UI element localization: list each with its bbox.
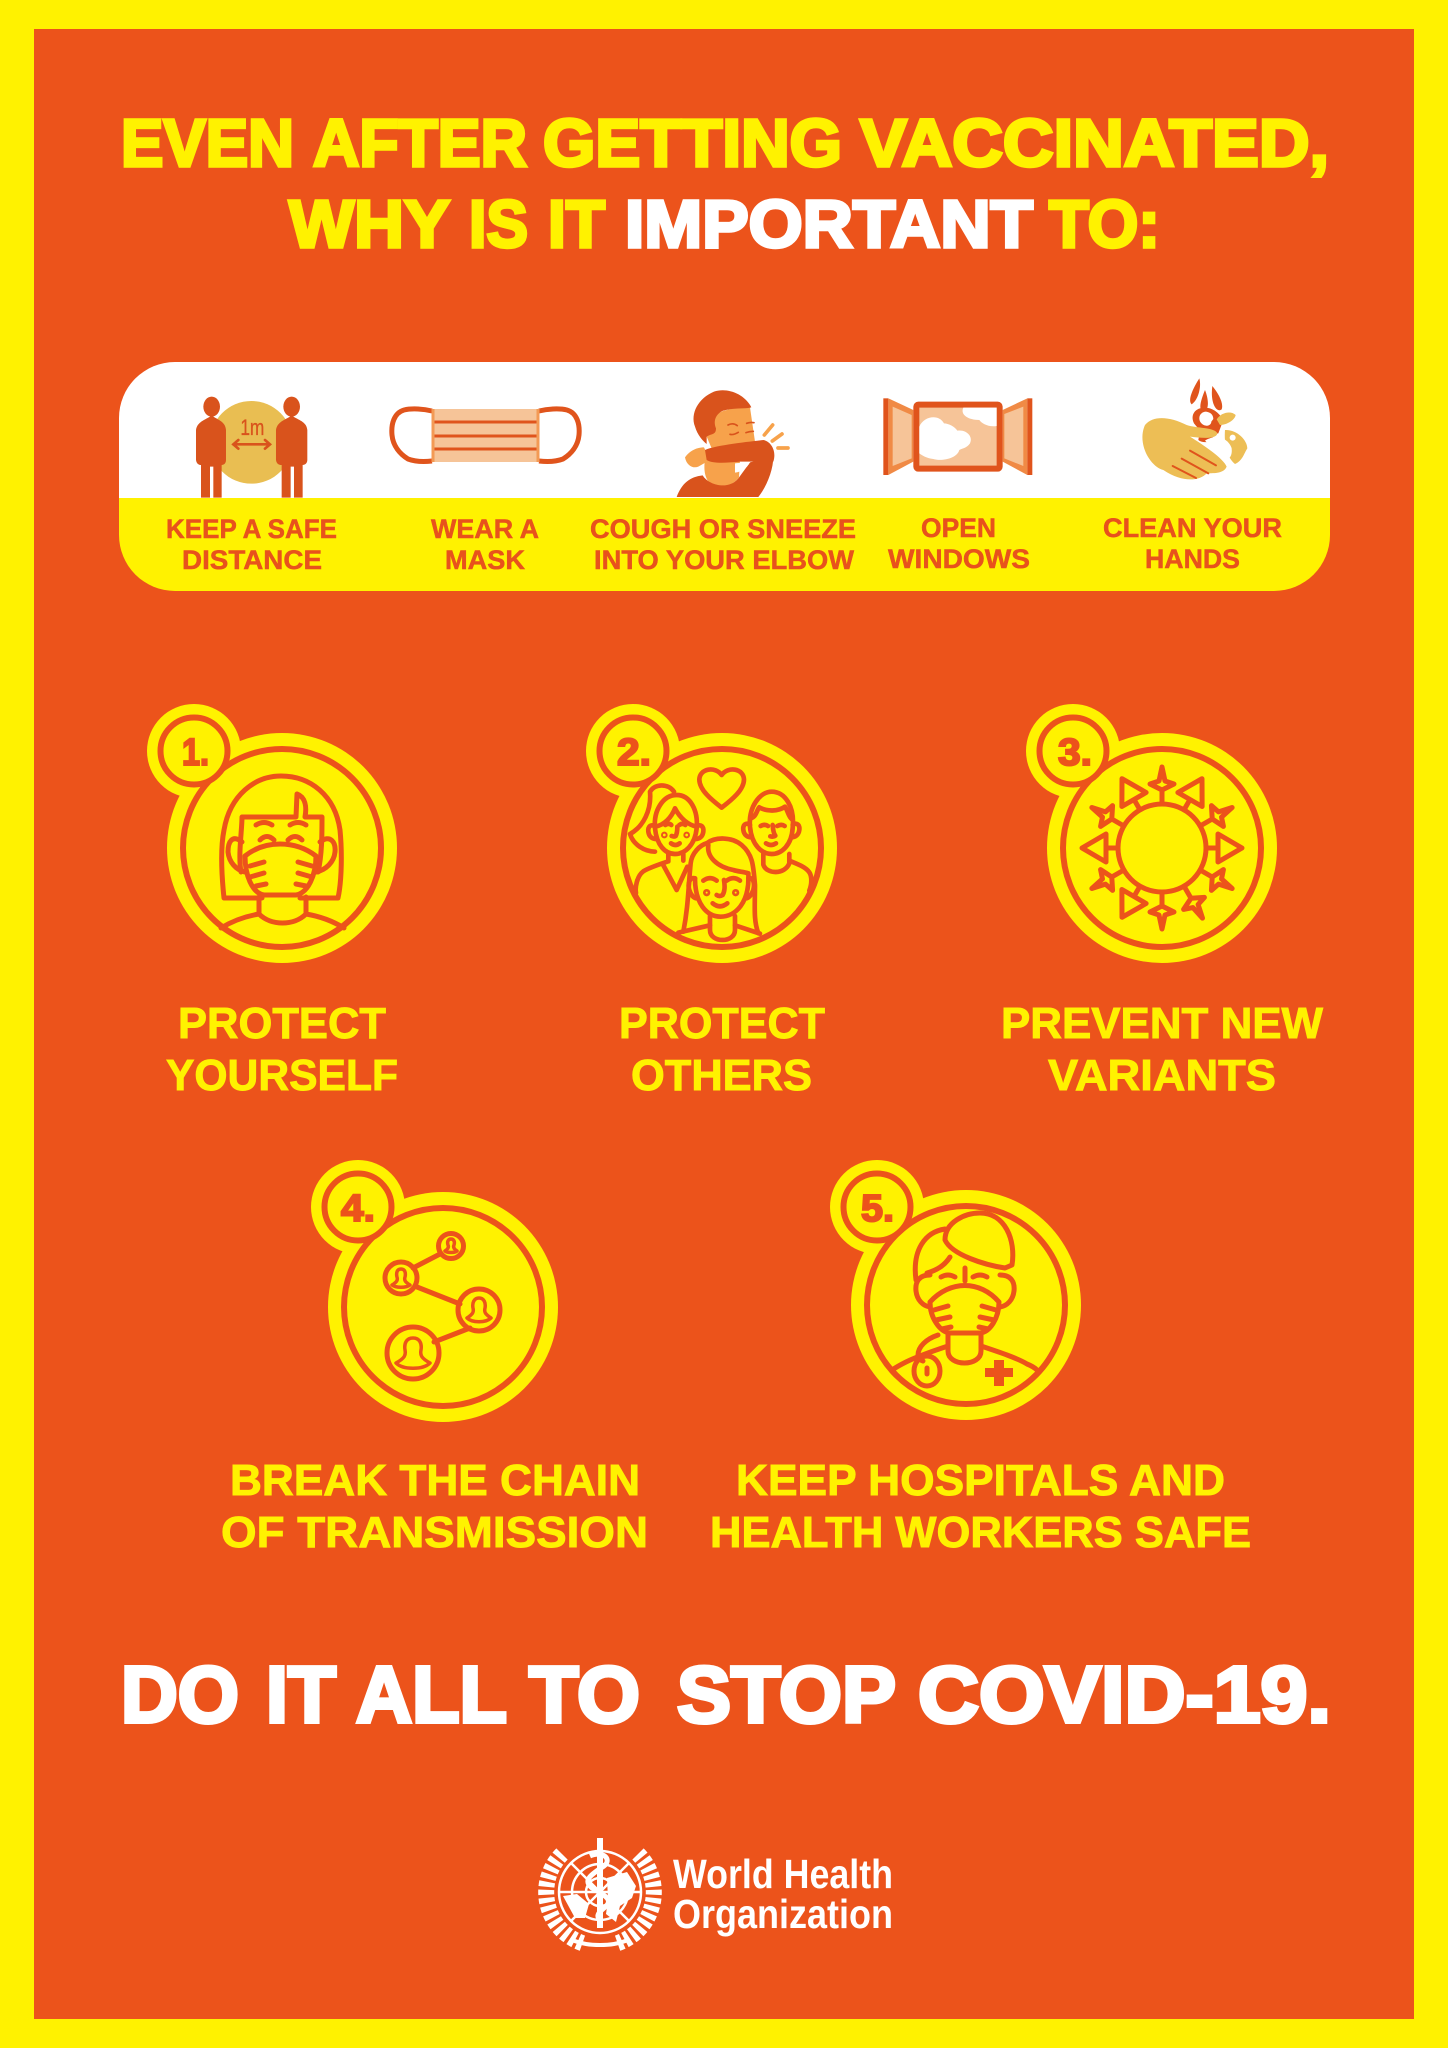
label: open windows [888,513,1030,574]
logo: World Health Organization: World Health [673,1851,893,1897]
label: wear a mask: WEAR A [431,514,539,544]
label: keep hospitals and health workers safe [710,1456,1251,1557]
label: keep a safe distance: KEEP A SAFE [166,514,337,544]
closing statement: TO [529,1650,640,1739]
icon: clean hands [1142,378,1247,479]
icon: WHO emblem [546,1838,654,1945]
label: protect others: PROTECT [619,999,825,1048]
label: keep hospitals and health workers safe: KEEP HOSPITALS AND [736,1456,1225,1505]
icon: medical cross [985,1360,1013,1386]
label: open windows: WINDOWS [888,544,1030,574]
label: break the chain of transmission [221,1456,648,1557]
label: keep a safe distance [166,514,337,575]
icon: 2 protect others [586,704,837,963]
label: clean your hands: CLEAN YOUR [1103,513,1282,543]
logo: World Health Organization: Organization [673,1891,893,1937]
label: keep a safe distance: DISTANCE [182,545,322,575]
panel: prevention measures strip [119,362,1330,591]
title: AFTER [313,106,527,181]
icon: 4 break the chain: 4. [341,1188,375,1230]
label: cough or sneeze: INTO YOUR ELBOW [594,545,855,575]
label: clean your hands [1103,513,1282,574]
label: protect yourself [166,999,398,1100]
icon: 4 break the chain [311,1160,558,1422]
title: VACCINATED, [860,106,1329,181]
icon: cough into elbow [677,390,788,497]
label: keep hospitals and health workers safe: HEALTH WORKERS SAFE [710,1508,1251,1557]
title [121,106,1329,262]
label: protect others [619,999,825,1100]
icon: 1 protect yourself [147,704,397,963]
icon: mask [392,409,579,462]
title: IMPORTANT [625,187,1033,262]
label: wear a mask [431,514,539,575]
label: break the chain of transmission: OF TRANSMISSION [221,1508,648,1557]
label: prevent new variants [1001,999,1323,1100]
title: IS [469,187,528,262]
label: cough or sneeze: COUGH OR SNEEZE [590,514,856,544]
icon: 3 prevent new variants [1026,704,1277,963]
closing statement: DO [121,1650,239,1739]
label: clean your hands: HANDS [1145,544,1240,574]
icon: 2 protect others: 2. [617,732,651,774]
icon: safe distance [196,397,307,498]
title: WHY [289,187,450,262]
icon: 5 keep hospitals safe [830,1160,1081,1420]
label: protect yourself: YOURSELF [166,1051,398,1100]
title: IT [548,187,605,262]
logo: World Health Organization [546,1838,893,1945]
closing statement [121,1650,1331,1739]
title: EVEN [121,106,294,181]
icon: safe distance: 1m [240,415,264,440]
icon: 3 prevent new variants: 3. [1058,732,1092,774]
label: prevent new variants: PREVENT NEW [1001,999,1323,1048]
label: cough or sneeze [590,514,856,575]
title: GETTING [543,106,842,181]
label: protect others: OTHERS [631,1051,812,1100]
label: open windows: OPEN [921,513,996,543]
icon: open window [883,398,1032,475]
title: TO: [1049,187,1160,262]
closing statement: COVID-19. [918,1650,1331,1739]
label: protect yourself: PROTECT [178,999,386,1048]
label: break the chain of transmission: BREAK THE CHAIN [230,1456,640,1505]
icon: 1 protect yourself: 1. [182,732,209,774]
label: prevent new variants: VARIANTS [1048,1051,1276,1100]
closing statement: STOP [677,1650,896,1739]
label: wear a mask: MASK [445,545,526,575]
closing statement: IT [266,1650,336,1739]
closing statement: ALL [356,1650,507,1739]
icon: 5 keep hospitals safe: 5. [861,1188,894,1230]
